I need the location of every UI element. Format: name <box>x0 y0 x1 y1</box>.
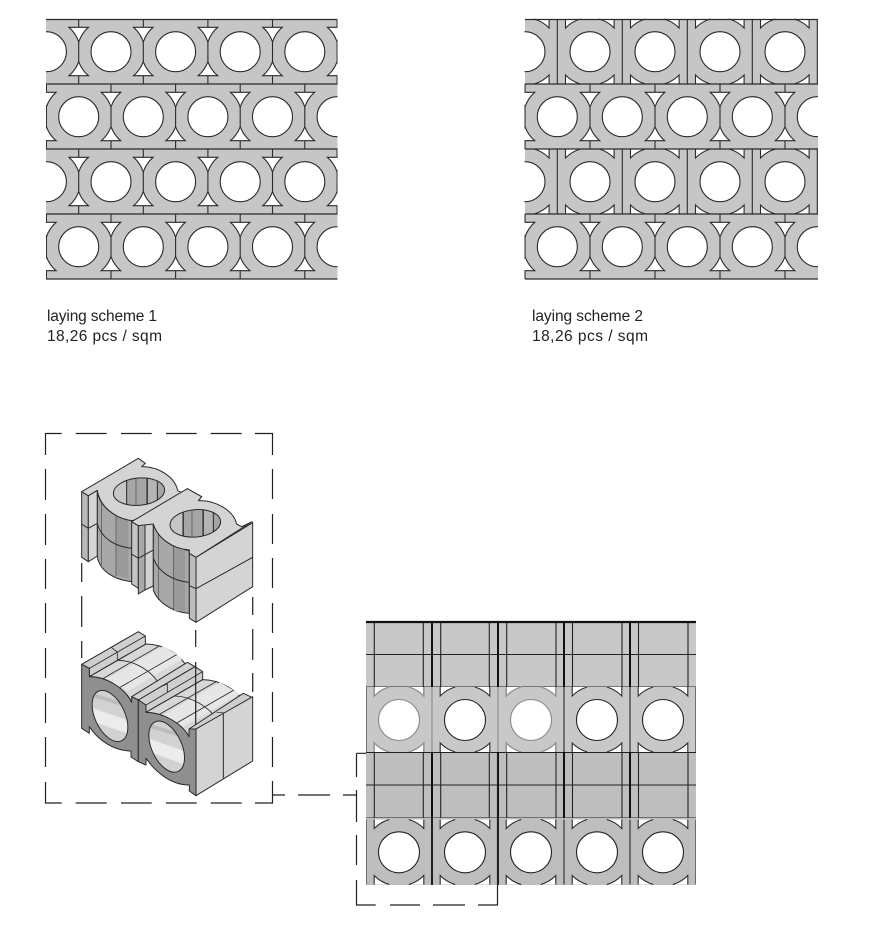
side face <box>196 697 253 796</box>
front block rear ridge <box>138 667 203 712</box>
hole back block <box>114 478 164 505</box>
row 3 <box>524 150 818 214</box>
row 2 <box>515 84 837 149</box>
laying scheme 1 pattern <box>46 18 338 280</box>
laying scheme 2 pattern <box>524 18 818 280</box>
back block front face <box>82 664 138 762</box>
caption: laying scheme 2: 18,26 pcs / sqm <box>532 328 648 345</box>
row 1 <box>524 18 818 84</box>
back block curved wall <box>97 492 132 582</box>
caption: laying scheme 1: laying scheme 1 <box>47 308 157 325</box>
block row 3 <box>366 752 696 818</box>
back block hole <box>92 690 128 742</box>
caption: laying scheme 1 <box>47 308 162 345</box>
block row 4 with holes <box>366 818 696 885</box>
top face front block <box>132 489 252 557</box>
back block flange <box>82 492 88 562</box>
block row 1 <box>366 622 696 687</box>
front block front ridge <box>189 693 253 729</box>
row 4 <box>515 214 837 279</box>
dashed connector line <box>272 794 356 796</box>
front block flange <box>132 522 138 588</box>
front block side face <box>189 553 196 622</box>
front block curved top <box>146 680 246 737</box>
front block hole <box>149 722 184 772</box>
back block curved top <box>89 644 188 702</box>
row 3 <box>46 150 338 214</box>
dashed frame around detail <box>356 753 498 905</box>
projection dashes <box>82 563 253 725</box>
front block curved wall <box>153 524 189 613</box>
top face back block <box>82 458 202 521</box>
dashed frame around isometric blocks <box>46 434 272 803</box>
row 2 <box>46 84 338 148</box>
isometric view: stacked blocks top side <box>82 458 253 622</box>
row 4 <box>46 214 338 278</box>
row 1 <box>46 20 338 84</box>
caption: laying scheme 2: laying scheme 2 <box>532 308 643 325</box>
caption: laying scheme 2 <box>532 308 648 345</box>
isometric view: stacked blocks hole side <box>82 632 253 796</box>
back block front ridge <box>132 662 195 700</box>
elevation view of wall <box>366 620 696 885</box>
hole front block <box>170 510 220 537</box>
back block rear ridge <box>82 632 145 677</box>
caption: laying scheme 1: 18,26 pcs / sqm <box>47 328 162 345</box>
front block front face <box>138 700 196 796</box>
block row 2 with holes <box>366 686 696 752</box>
